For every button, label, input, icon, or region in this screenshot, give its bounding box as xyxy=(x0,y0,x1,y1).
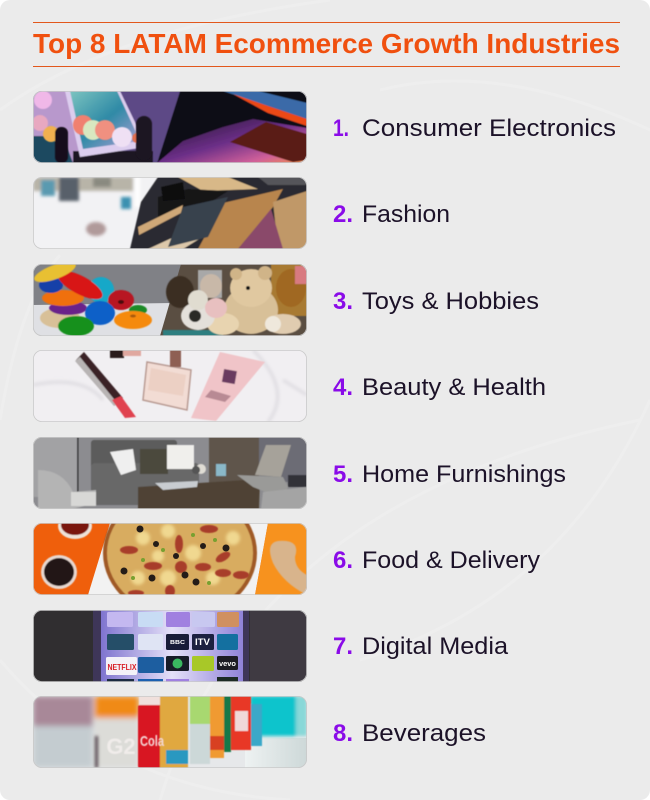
photo: pizza xyxy=(33,523,307,595)
photo: smart TV app screen: vevo xyxy=(219,661,236,668)
number and label: Digital Media xyxy=(362,633,509,660)
row 6: food and delivery xyxy=(33,523,540,595)
row 3: toys and hobbies xyxy=(32,258,539,336)
photo: lipstick, perfume and tube xyxy=(33,350,307,422)
row 2: fashion xyxy=(33,177,450,249)
row 1: consumer electronics xyxy=(32,91,616,163)
photo: drink bottles: G2 xyxy=(106,734,136,759)
number and label: 1. xyxy=(333,115,349,142)
number and label: Consumer Electronics xyxy=(362,115,616,142)
photo: smart TV app screen xyxy=(33,610,307,682)
number and label: 8. xyxy=(333,720,353,747)
photo: phone and laptop xyxy=(32,91,307,163)
number and label: 7. xyxy=(333,633,353,660)
number and label: Food & Delivery xyxy=(362,547,540,574)
photo: living room xyxy=(33,437,307,509)
photo: smart TV app screen: ITV xyxy=(195,637,210,647)
number and label: Home Furnishings xyxy=(362,461,566,488)
photo: drink bottles xyxy=(33,696,307,768)
row 4: beauty and health xyxy=(33,350,546,422)
row 8: beverages xyxy=(33,696,486,768)
number and label: 5. xyxy=(333,461,353,488)
number and label: Toys & Hobbies xyxy=(362,288,539,315)
number and label: Beauty & Health xyxy=(362,374,546,401)
number and label: 2. xyxy=(333,201,353,228)
row 7: digital media xyxy=(33,610,509,682)
title: Top 8 LATAM Ecommerce Growth Industries xyxy=(33,28,620,59)
number and label: Beverages xyxy=(362,720,486,747)
photo: toy rings and teddy bears xyxy=(32,258,307,336)
photo: smart TV app screen: BBC xyxy=(170,640,186,646)
number and label: 6. xyxy=(333,547,353,574)
photo: drink bottles: Cola xyxy=(140,733,164,750)
photo: smart TV app screen: NETFLIX xyxy=(108,663,137,672)
row 5: home furnishings xyxy=(33,437,566,509)
number and label: Fashion xyxy=(362,201,450,228)
number and label: 3. xyxy=(333,288,353,315)
photo: clothes rack xyxy=(33,177,307,249)
number and label: 4. xyxy=(333,374,353,401)
